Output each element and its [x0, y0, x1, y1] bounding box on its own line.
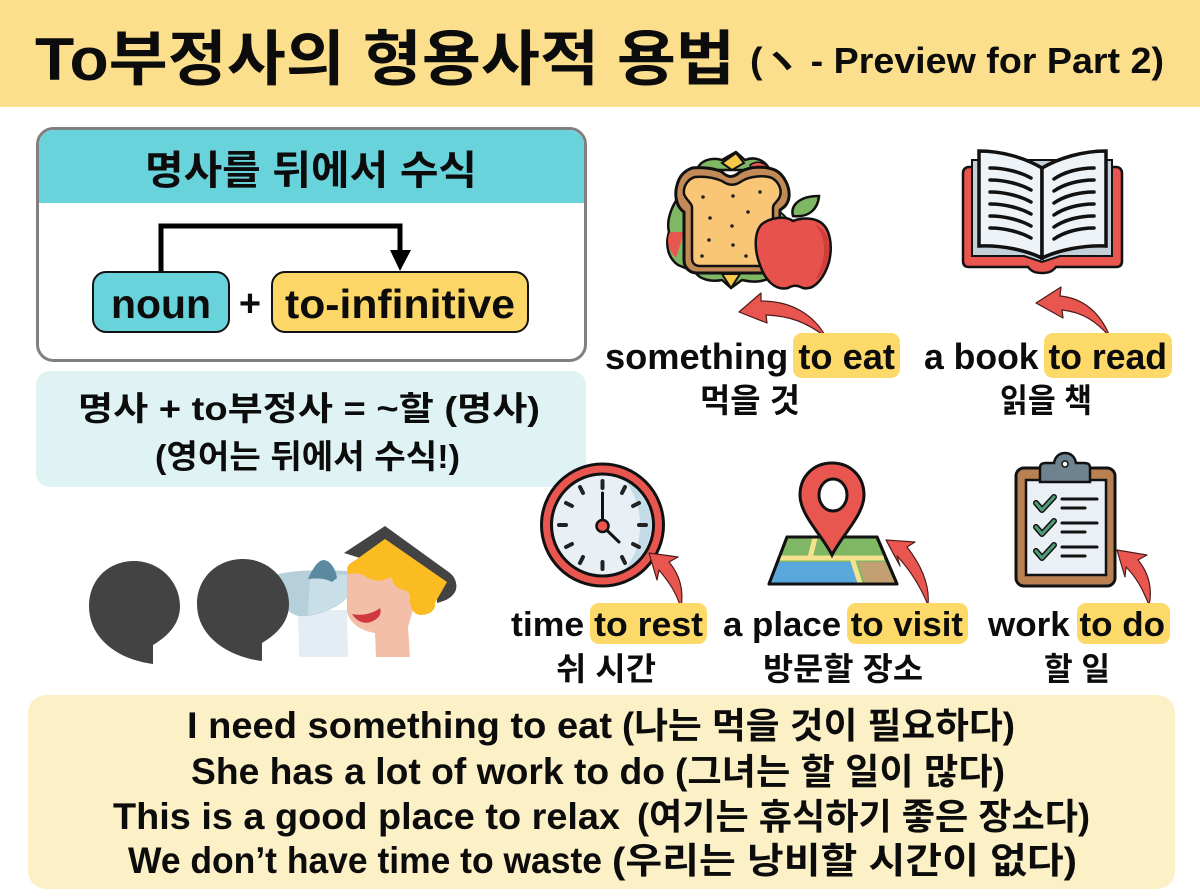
panel heading: 명사를 뒤에서 수식	[145, 149, 477, 193]
example sentence 1: (나는 먹을 것이 필요하다)	[622, 705, 1015, 746]
translation: 읽을 책	[1000, 382, 1092, 419]
arrow: points to clipboard	[1117, 550, 1150, 605]
speech bubble 1	[89, 561, 180, 664]
example sentence 3: This is a good place to relax	[113, 796, 620, 837]
highlight: to rest	[590, 603, 707, 644]
speech bubble 2	[197, 559, 289, 661]
phrase: a book to read: a book to read	[924, 336, 1167, 377]
item: a place to visit	[723, 463, 968, 687]
arrow: points to clock	[649, 553, 682, 608]
noun box: noun	[111, 281, 211, 327]
arrow: points to map	[886, 540, 928, 605]
highlight: to visit	[847, 603, 968, 644]
example sentence 2	[191, 751, 1005, 792]
arrow: noun to to-infinitive	[161, 226, 411, 272]
arrow: points to book	[1036, 287, 1110, 337]
highlight: to read	[1044, 333, 1172, 378]
translation: 먹을 것	[700, 382, 800, 419]
item: a book to read	[924, 151, 1172, 419]
example sentence 1: I need something to eat	[187, 705, 612, 746]
icon: open book	[963, 151, 1122, 273]
icon: map with pin	[769, 463, 897, 584]
example sentence 2: (그녀는 할 일이 많다)	[675, 751, 1005, 792]
illustration: speech bubbles and person	[89, 526, 456, 664]
arrow: points to sandwich	[739, 293, 826, 337]
item: time to rest	[511, 464, 707, 687]
example sentence 4: (우리는 낭비할 시간이 없다)	[612, 840, 1077, 881]
person	[275, 526, 456, 657]
example sentence 4: We don’t have time to waste	[128, 840, 602, 881]
phrase: work to do: work to do	[987, 606, 1165, 644]
translation: 할 일	[1044, 651, 1110, 687]
translation: 방문할 장소	[763, 651, 923, 687]
example sentence 3	[113, 796, 1090, 837]
title: To부정사의 형용사적 용법	[35, 26, 735, 93]
plus sign: +	[239, 283, 261, 325]
rule line 2: (영어는 뒤에서 수식!)	[155, 438, 460, 475]
icon: sandwich and apple	[667, 152, 831, 288]
example sentence 2: She has a lot of work to do	[191, 751, 665, 792]
panel: noun modification diagram	[38, 128, 586, 360]
title banner	[0, 0, 1200, 107]
phrase: something to eat: something to eat	[605, 336, 895, 377]
panel: example sentences	[28, 695, 1175, 889]
phrase: time to rest: time to rest	[511, 606, 703, 644]
to-infinitive box	[272, 272, 528, 332]
rule line 1: 명사 + to부정사 = ~할 (명사)	[78, 390, 540, 427]
to-infinitive box: to-infinitive	[285, 281, 515, 327]
subtitle: (ヽ - Preview for Part 2)	[750, 40, 1164, 81]
panel: rule explanation	[36, 371, 586, 487]
highlight: to eat	[793, 333, 900, 378]
noun box	[93, 272, 229, 332]
example sentence 4	[128, 840, 1077, 881]
icon: clock	[542, 464, 664, 586]
example sentence 1	[187, 705, 1015, 746]
example sentence 3: (여기는 휴식하기 좋은 장소다)	[637, 796, 1090, 837]
phrase: a place to visit: a place to visit	[723, 606, 963, 644]
item: something to eat	[605, 152, 900, 419]
translation: 쉬 시간	[556, 651, 656, 687]
item: work to do	[987, 453, 1170, 687]
highlight: to do	[1077, 603, 1170, 644]
icon: clipboard checklist	[1016, 453, 1115, 586]
